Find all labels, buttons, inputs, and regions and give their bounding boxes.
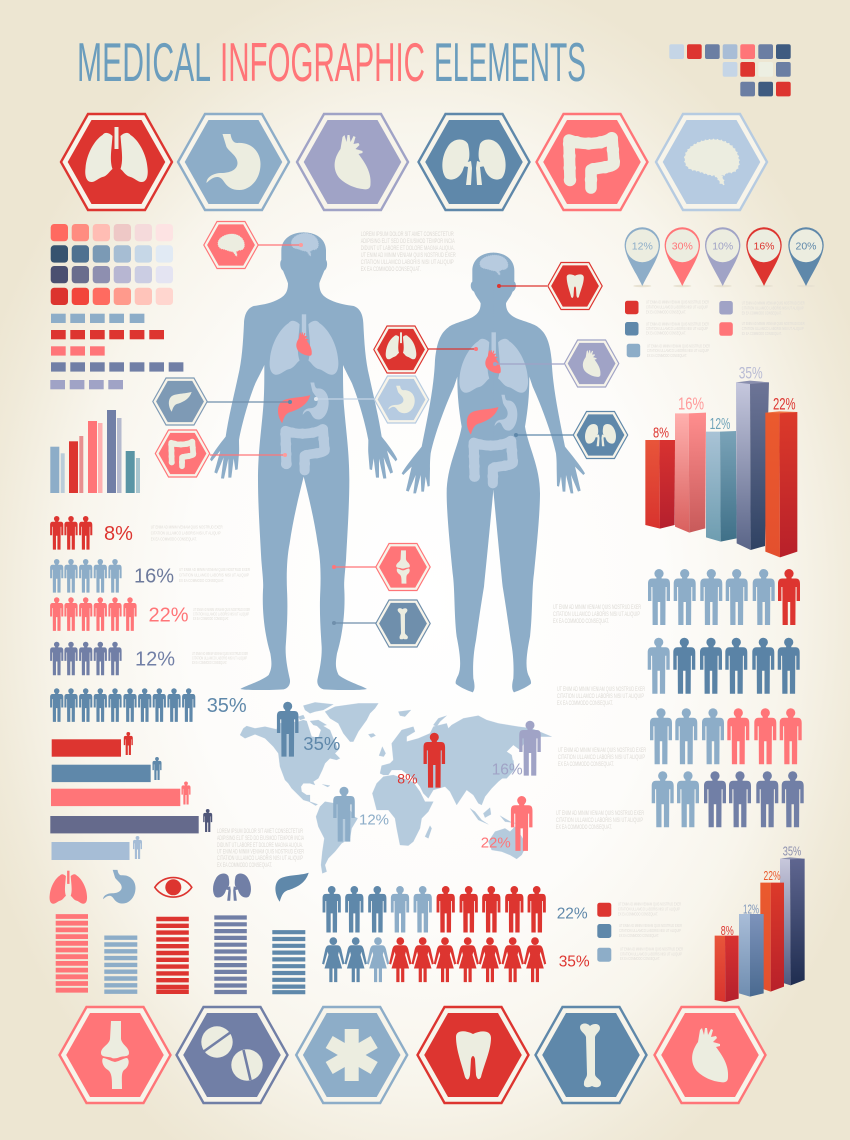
legend bottom centre: UT ENIM AD MINIM VENIAM QUIS NOSTRUD EXER	[620, 946, 683, 952]
percentages bottom centre: 22%	[557, 905, 588, 922]
world map	[240, 702, 552, 873]
hexagon: stomach	[178, 114, 289, 210]
title: MEDICAL	[77, 31, 211, 93]
legend under pins: CITATION ULLAMCO LABORIS NISI UT ALIQUIP	[647, 348, 709, 353]
small text blocks left	[151, 524, 250, 665]
pin 10%	[705, 227, 740, 287]
text block: intro: LOREM IPSUM DOLOR SIT AMET CONSECTETUR	[361, 232, 454, 238]
small callout hexagons	[153, 221, 628, 647]
callout hexagon: heart	[564, 340, 619, 387]
stripes: coral	[56, 916, 88, 990]
legend under pins: CITATION ULLAMCO LABORIS NISI UT ALIQUIP	[742, 306, 804, 310]
text block: map: EX EA COMMODO CONSEQUAT.	[217, 863, 272, 869]
legend under pins: EX EA COMMODO CONSEQUAT.	[647, 353, 687, 358]
pictogram rows right	[648, 569, 804, 827]
percentages bottom centre: 35%	[559, 954, 590, 971]
text blocks beside right pictograms: EX EA COMMODO CONSEQUAT.	[556, 825, 612, 831]
male body figure	[210, 232, 397, 690]
text block: intro: DIDUNT UT LABORE ET DOLORE MAGNA ALIQUA.	[361, 246, 455, 252]
small text blocks left: EX EA COMMODO CONSEQUAT.	[151, 536, 197, 542]
text block: map: DIDUNT UT LABORE ET DOLORE MAGNA ALIQUA.	[217, 843, 303, 849]
text blocks beside right pictograms: CITATION ULLAMCO LABORIS NISI UT ALIQUIP	[557, 694, 644, 700]
right row 3	[650, 708, 802, 764]
small text blocks left: UT ENIM AD MINIM VENIAM QUIS NOSTRUD EXER	[179, 567, 250, 572]
pin 10%: 10%	[712, 240, 733, 252]
female body figure	[402, 253, 585, 692]
text block: intro	[361, 232, 456, 273]
pictogram rows left	[50, 516, 195, 722]
3D bar chart small labels: 35%	[783, 844, 802, 859]
percentages left: 8%	[104, 523, 133, 545]
callout hexagon: intestine	[155, 430, 210, 477]
title: INFOGRAPHIC	[220, 31, 425, 93]
text blocks beside right pictograms: EX EA COMMODO CONSEQUAT.	[557, 701, 613, 707]
map figures	[277, 702, 541, 851]
stripes: light blue	[104, 938, 137, 992]
percentages bottom centre	[557, 905, 590, 971]
row 8%	[50, 516, 92, 550]
legend under pins: EX EA COMMODO CONSEQUAT.	[742, 331, 782, 336]
text block: intro: CITATION ULLAMCO LABORIS NISI UT ALIQUIP	[361, 260, 454, 266]
segmented rows	[50, 314, 183, 389]
connector lines	[207, 243, 573, 625]
organ icons row	[50, 870, 309, 904]
row 22%	[50, 597, 137, 631]
3D bar chart small labels: 12%	[743, 901, 759, 916]
3D bar chart large labels: 35%	[739, 364, 763, 383]
icon: stomach	[103, 870, 136, 904]
pin 20%: 20%	[795, 240, 817, 252]
text block: map: LOREM IPSUM DOLOR SIT AMET CONSECTETUR	[217, 829, 303, 835]
hexagon: pills	[176, 1007, 288, 1103]
legend under pins: EX EA COMMODO CONSEQUAT.	[646, 330, 686, 336]
small text blocks left: CITATION ULLAMCO LABORIS NISI UT ALIQUIP	[179, 572, 249, 578]
3D bar chart large labels: 22%	[773, 394, 796, 413]
3D bar chart large labels: 16%	[678, 393, 704, 413]
callout hexagon: lungs	[374, 326, 428, 373]
text blocks beside right pictograms: EX EA COMMODO CONSEQUAT.	[558, 762, 614, 768]
hexagon: tooth	[418, 1007, 528, 1103]
colour swatches top right	[669, 44, 791, 96]
icon: eye	[155, 878, 192, 897]
small text blocks left: CITATION ULLAMCO LABORIS NISI UT ALIQUIP	[193, 612, 249, 616]
pin 12%: 12%	[632, 240, 653, 252]
pin 20%	[788, 227, 824, 287]
small text blocks left: UT ENIM AD MINIM VENIAM QUIS NOSTRUD EXER	[193, 607, 250, 612]
legend bottom centre: UT ENIM AD MINIM VENIAM QUIS NOSTRUD EXER	[619, 923, 682, 928]
map-pin percentages	[625, 227, 824, 287]
right row 4	[652, 771, 804, 827]
bar chart small	[50, 410, 140, 493]
legend under pins: EX EA COMMODO CONSEQUAT.	[742, 310, 782, 316]
callout hexagon: brain	[204, 221, 258, 269]
text block: intro: UT ENIM AD MINIM VENIAM QUIS NOSTRUD EXER	[361, 253, 456, 259]
legend under pins: UT ENIM AD MINIM VENIAM QUIS NOSTRUD EXER	[646, 300, 709, 304]
legend bottom centre: UT ENIM AD MINIM VENIAM QUIS NOSTRUD EXER	[618, 902, 681, 906]
percentages left: 35%	[207, 695, 247, 717]
row 12%	[50, 642, 122, 675]
map percentages: 16%	[492, 761, 523, 778]
pin 16%	[746, 227, 782, 287]
callout hexagon: bone	[376, 600, 430, 647]
pin 30%: 30%	[672, 240, 693, 252]
text blocks beside right pictograms: CITATION ULLAMCO LABORIS NISI UT ALIQUIP	[553, 612, 640, 618]
callout hexagon: liver	[153, 378, 207, 425]
text blocks beside right pictograms	[553, 605, 646, 831]
legend under pins: CITATION ULLAMCO LABORIS NISI UT ALIQUIP	[646, 304, 708, 310]
title	[77, 31, 586, 93]
map percentages: 8%	[397, 770, 418, 786]
top row of organ hexagons	[61, 114, 767, 210]
text blocks beside right pictograms: UT ENIM AD MINIM VENIAM QUIS NOSTRUD EXER	[557, 687, 645, 693]
text block: intro: EX EA COMMODO CONSEQUAT.	[361, 267, 421, 273]
text blocks beside right pictograms: UT ENIM AD MINIM VENIAM QUIS NOSTRUD EXER	[558, 748, 646, 754]
pin 16%: 16%	[753, 240, 775, 252]
legend under pins: EX EA COMMODO CONSEQUAT.	[646, 310, 686, 314]
striped bars	[56, 916, 305, 992]
3D bar chart large labels	[653, 364, 796, 441]
legend bottom centre: CITATION ULLAMCO LABORIS NISI UT ALIQUIP	[618, 906, 680, 912]
text blocks beside right pictograms: CITATION ULLAMCO LABORIS NISI UT ALIQUIP	[556, 818, 643, 824]
callout hexagon: tooth	[548, 262, 602, 310]
women row	[322, 937, 546, 982]
3D bar chart small labels: 8%	[721, 923, 734, 938]
percentages left: 16%	[134, 566, 174, 588]
map percentages: 22%	[481, 835, 511, 852]
stripes: blue	[272, 932, 305, 992]
3D bar chart large labels: 12%	[710, 416, 730, 433]
callout hexagon: kidneys	[573, 411, 628, 459]
legend under pins: CITATION ULLAMCO LABORIS NISI UT ALIQUIP	[646, 326, 708, 331]
hexagon: brain	[656, 114, 767, 210]
legend under pins	[625, 300, 805, 358]
3D bar chart small labels	[721, 844, 802, 938]
small text blocks left: EX EA COMMODO CONSEQUAT.	[179, 578, 224, 583]
hexagon: bone	[536, 1007, 646, 1103]
colour swatch grid	[51, 224, 173, 305]
icon: liver	[275, 873, 309, 902]
hexagon: heart	[654, 1007, 766, 1103]
legend bottom centre	[597, 902, 683, 962]
hexagon: heart	[297, 114, 408, 210]
right row 2	[648, 638, 800, 694]
legend bottom centre: CITATION ULLAMCO LABORIS NISI UT ALIQUIP	[619, 928, 681, 933]
text blocks beside right pictograms: UT ENIM AD MINIM VENIAM QUIS NOSTRUD EXER	[556, 811, 644, 817]
hexagon: star of life	[296, 1007, 407, 1103]
text blocks beside right pictograms: EX EA COMMODO CONSEQUAT.	[553, 619, 609, 625]
map percentages: 35%	[303, 733, 340, 754]
text block: map: UT ENIM AD MINIM VENIAM QUIS NOSTRUD EXER	[217, 850, 304, 856]
legend under pins: UT ENIM AD MINIM VENIAM QUIS NOSTRUD EXER	[742, 321, 805, 326]
legend under pins: UT ENIM AD MINIM VENIAM QUIS NOSTRUD EXER	[646, 322, 709, 326]
small text blocks left: UT ENIM AD MINIM VENIAM QUIS NOSTRUD EXER	[151, 524, 223, 530]
legend under pins: UT ENIM AD MINIM VENIAM QUIS NOSTRUD EXER	[742, 300, 805, 306]
map percentages	[303, 733, 523, 852]
legend bottom centre: EX EA COMMODO CONSEQUAT.	[620, 956, 660, 961]
text block: map: CITATION ULLAMCO LABORIS NISI UT ALIQUIP	[217, 856, 303, 862]
3D bar chart small labels: 22%	[764, 868, 781, 883]
text block: map: ADIPISING ELIT SED DO EIUSMOD TEMPOR INCIA	[217, 836, 304, 842]
map percentages: 12%	[359, 811, 389, 828]
legend bottom centre: CITATION ULLAMCO LABORIS NISI UT ALIQUIP	[620, 952, 682, 956]
men row	[323, 886, 546, 932]
percentages left: 22%	[148, 605, 189, 627]
legend bottom centre: EX EA COMMODO CONSEQUAT.	[619, 933, 659, 938]
right row 1	[648, 569, 800, 625]
small text blocks left: CITATION ULLAMCO LABORIS NISI UT ALIQUIP	[151, 530, 221, 536]
legend bottom centre: EX EA COMMODO CONSEQUAT.	[618, 912, 658, 916]
callout hexagon: stomach	[374, 376, 429, 423]
text block: map	[217, 829, 304, 869]
bottom row of hexagons	[60, 1007, 766, 1103]
percentages left	[104, 523, 247, 717]
small text blocks left: CITATION ULLAMCO LABORIS NISI UT ALIQUIP	[192, 656, 247, 660]
hexagon: intestine	[536, 114, 648, 210]
row 16%	[50, 559, 122, 593]
callout hexagon: joint	[376, 543, 430, 591]
3D bar chart small	[715, 857, 805, 1002]
text blocks beside right pictograms: UT ENIM AD MINIM VENIAM QUIS NOSTRUD EXER	[553, 605, 641, 611]
text block: intro: ADIPISING ELIT SED DO EIUSMOD TEMPOR INCIA	[361, 239, 455, 245]
stripes: slate	[214, 918, 247, 992]
small text blocks left: UT ENIM AD MINIM VENIAM QUIS NOSTRUD EXER	[192, 651, 248, 656]
3D bar chart large labels: 8%	[653, 424, 669, 441]
legend under pins: UT ENIM AD MINIM VENIAM QUIS NOSTRUD EXER	[647, 344, 710, 348]
small text blocks left: EX EA COMMODO CONSEQUAT.	[193, 616, 229, 621]
icon: lungs	[50, 871, 87, 904]
pin 12%	[625, 227, 660, 287]
horizontal bars with figures	[50, 732, 212, 860]
pin 30%	[665, 227, 700, 287]
hexagon: joint	[60, 1007, 170, 1103]
3D bar chart large	[645, 381, 797, 557]
row 35%	[50, 688, 195, 722]
hexagon: kidneys	[418, 114, 530, 210]
stripes: red	[156, 919, 189, 992]
text blocks beside right pictograms: CITATION ULLAMCO LABORIS NISI UT ALIQUIP	[558, 755, 645, 761]
percentages left: 12%	[135, 649, 175, 671]
icon: kidneys	[213, 873, 251, 901]
small text blocks left: EX EA COMMODO CONSEQUAT.	[192, 660, 227, 665]
title: ELEMENTS	[434, 31, 586, 93]
hexagon: lungs	[61, 114, 172, 210]
legend under pins: CITATION ULLAMCO LABORIS NISI UT ALIQUIP	[742, 326, 804, 331]
